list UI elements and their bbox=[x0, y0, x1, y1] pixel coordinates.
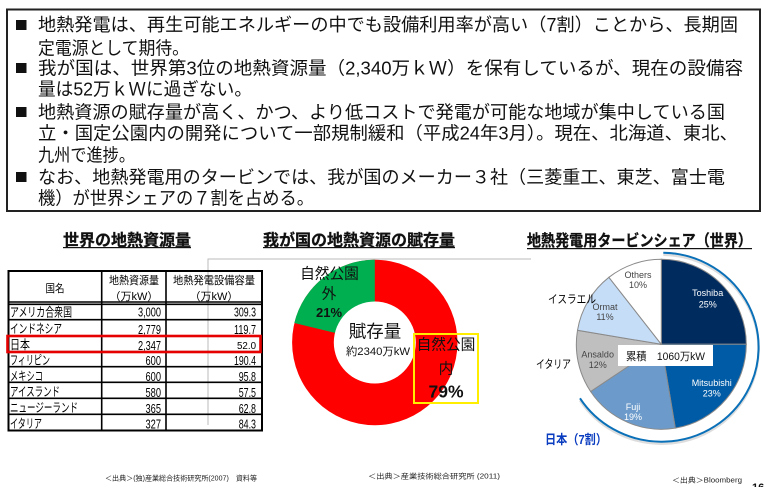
capacity values: 52.0 bbox=[237, 341, 256, 352]
table header: （万kW） bbox=[190, 290, 238, 303]
label: Israel: イスラエル bbox=[548, 294, 596, 306]
callout: cumulative capacity: 累積 1060万kW bbox=[626, 349, 706, 363]
donut centre label: 約2340万kW bbox=[346, 344, 411, 358]
panel: summary text box bbox=[7, 10, 760, 211]
slice: Toshiba bbox=[661, 259, 746, 344]
label: Japan 70%: 日本（7割） bbox=[545, 432, 607, 447]
capacity values: 309.3 bbox=[234, 304, 256, 320]
pie chart: turbine market share bbox=[536, 253, 759, 447]
bullet 3 text: 九州で進捗。 bbox=[38, 146, 135, 166]
label: inside parks 79% bbox=[414, 334, 478, 403]
resource values: 2,779 bbox=[138, 322, 161, 337]
bullet 3 text bbox=[16, 102, 738, 166]
bullet 4 text: 機）が世界シェアの７割を占める。 bbox=[38, 188, 314, 208]
bullet 2 text bbox=[16, 58, 743, 100]
heading: Japan resources: 我が国の地熱資源の賦存量 bbox=[263, 230, 455, 250]
source: pie: ＜出典＞Bloomberg bbox=[672, 476, 742, 484]
slice: Fuji bbox=[591, 344, 675, 429]
pie labels: 12% bbox=[589, 360, 607, 370]
pie labels: 23% bbox=[703, 388, 721, 398]
source: donut: ＜出典＞産業技術総合研究所 (2011) bbox=[368, 472, 500, 480]
connector line (gray) bbox=[208, 259, 531, 425]
red highlight: Japan row bbox=[8, 336, 260, 352]
capacity values: 95.8 bbox=[239, 369, 256, 384]
arc shadow bbox=[580, 255, 759, 444]
bullet 2 text: 量は52万ｋＷに過ぎない。 bbox=[38, 80, 252, 100]
label: outside parks 21%: 自然公園 bbox=[300, 266, 359, 282]
slice: Mitsubishi bbox=[661, 344, 746, 428]
capacity values: 57.5 bbox=[239, 385, 256, 400]
row names: フィリピン bbox=[10, 354, 50, 368]
row names: アメリカ合衆国 bbox=[10, 306, 72, 320]
donut segment: outside parks bbox=[294, 260, 375, 342]
row names: ニュージーランド bbox=[10, 401, 78, 415]
capacity values: 119.7 bbox=[234, 322, 256, 337]
slice: Ansaldo bbox=[576, 330, 661, 392]
resource values: 365 bbox=[146, 401, 161, 416]
row names: イタリア bbox=[10, 417, 42, 431]
blue arc: Japan 70% bbox=[580, 253, 759, 442]
pie labels: Toshiba bbox=[692, 288, 723, 298]
donut centre label: 賦存量 bbox=[349, 322, 401, 342]
bullet 2 text: 我が国は、世界第3位の地熱資源量（2,340万ｋＷ）を保有しているが、現在の設備容 bbox=[38, 58, 743, 78]
label: inside parks 79%: 自然公園 bbox=[417, 336, 475, 354]
table: geothermal resources by country bbox=[8, 271, 262, 432]
bullet 4 text: なお、地熱発電用のタービンでは、我が国のメーカー３社（三菱重工、東芝、富士電 bbox=[38, 168, 725, 188]
label: outside parks 21%: 外 bbox=[322, 286, 337, 302]
bullet 3 text: 立・国定公園内の開発について一部規制緩和（平成24年3月）。現在、北海道、東北、 bbox=[38, 124, 738, 144]
pie labels: Others bbox=[624, 270, 652, 280]
capacity values: 84.3 bbox=[239, 416, 256, 432]
label: inside parks 79%: 79% bbox=[428, 382, 464, 402]
row names: 日本 bbox=[10, 338, 30, 352]
label: outside parks 21% bbox=[300, 266, 359, 320]
bullet 4 text bbox=[16, 168, 725, 208]
bullet 1 text: 地熱発電は、再生可能エネルギーの中でも設備利用率が高い（7割）ことから、長期固 bbox=[38, 15, 738, 35]
pie labels: 11% bbox=[596, 312, 614, 322]
slice: Others bbox=[609, 259, 661, 344]
table header bbox=[46, 273, 255, 303]
source: table: ＜出典＞(独)産業総合技術研究所(2007) 資料等 bbox=[105, 474, 257, 482]
pie labels: 25% bbox=[699, 300, 717, 310]
label: Italy: イタリア bbox=[536, 358, 571, 371]
capacity values: 62.8 bbox=[239, 401, 256, 416]
resource values: 600 bbox=[146, 353, 161, 368]
label: inside parks 79%: 内 bbox=[439, 360, 453, 378]
slice: Ormat bbox=[578, 277, 661, 344]
pie labels: 10% bbox=[629, 280, 647, 290]
bullet 1 text bbox=[16, 15, 738, 58]
donut centre label bbox=[346, 322, 411, 358]
resource values bbox=[138, 304, 161, 432]
row names bbox=[10, 306, 78, 431]
heading: world resources: 世界の地熱資源量 bbox=[63, 230, 191, 250]
resource values: 580 bbox=[146, 385, 161, 400]
donut chart: resources in/out of national parks bbox=[292, 260, 478, 425]
capacity values bbox=[234, 304, 256, 432]
pie labels: Fuji bbox=[626, 402, 640, 412]
pie labels: 19% bbox=[624, 412, 642, 422]
table header: 地熱発電設備容量 bbox=[173, 273, 255, 287]
pie labels bbox=[581, 270, 732, 422]
resource values: 600 bbox=[146, 369, 161, 384]
label: outside parks 21%: 21% bbox=[316, 305, 342, 320]
table header: （万kW） bbox=[110, 290, 158, 303]
pie labels: Mitsubishi bbox=[692, 378, 732, 388]
capacity values: 190.4 bbox=[234, 353, 256, 368]
resource values: 327 bbox=[146, 416, 161, 432]
bullet 1 text: 定電源として期待。 bbox=[38, 38, 189, 58]
pie labels: Ansaldo bbox=[581, 350, 614, 360]
table header: 地熱資源量 bbox=[109, 273, 159, 287]
resource values: 3,000 bbox=[138, 304, 161, 320]
callout: cumulative capacity bbox=[618, 345, 713, 366]
row names: アイスランド bbox=[10, 385, 60, 399]
table header: 国名 bbox=[46, 281, 64, 295]
pie labels: Ormat bbox=[592, 302, 618, 312]
row names: メキシコ bbox=[10, 370, 43, 384]
row names: インドネシア bbox=[10, 322, 62, 336]
resource values: 2,347 bbox=[138, 338, 161, 353]
bullet 3 text: 地熱資源の賦存量が高く、かつ、より低コストで発電が可能な地域が集中している国 bbox=[38, 102, 725, 122]
